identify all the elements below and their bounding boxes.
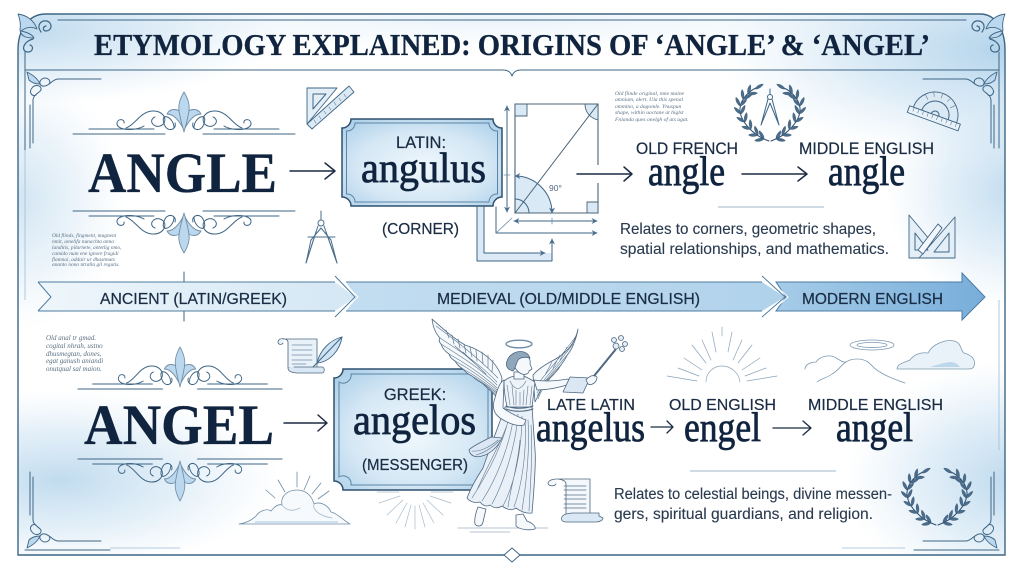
word: angel: angel <box>836 404 913 450</box>
diagram: geometry rectangle <box>477 104 598 261</box>
word: engel: engel <box>684 404 761 450</box>
script note: angel: onutqual sal maion. <box>46 365 102 373</box>
description: angel <box>614 486 892 523</box>
flourish: bottom of angle <box>73 211 295 253</box>
script note: angel <box>46 334 103 373</box>
box: latin angulus: LATIN: <box>396 134 446 152</box>
timeline segment: medieval: MEDIEVAL (OLD/MIDDLE ENGLISH) <box>437 291 700 308</box>
description: angle: spatial relationships, and mathematics. <box>620 241 889 258</box>
label: old french: OLD FRENCH <box>636 140 738 158</box>
box: greek angelos: angelos <box>353 398 476 444</box>
description: angle <box>620 221 889 258</box>
title: ETYMOLOGY EXPLAINED: ORIGINS OF ‘ANGLE’ & ‘ANGEL’ <box>94 27 930 62</box>
label: middle english: MIDDLE ENGLISH <box>799 140 934 158</box>
arrow: angle to latin <box>290 163 335 179</box>
icon: protractor <box>907 84 968 131</box>
icon: cloud and sun <box>239 472 350 524</box>
word: angelus: angelus <box>536 404 645 450</box>
flourish: top of angel <box>78 347 282 389</box>
label: corner: (CORNER) <box>382 221 459 238</box>
arrow: late latin to old english <box>651 421 673 433</box>
word: angle old french: angle <box>648 148 725 194</box>
box: greek angelos: GREEK: <box>384 386 446 404</box>
icon: scroll and quill <box>278 337 342 373</box>
timeline segment: ancient <box>38 276 358 317</box>
panel: angle <box>52 83 968 268</box>
flourish: bottom of angel <box>78 459 282 501</box>
timeline segment: medieval <box>346 276 788 317</box>
icon: halo and clouds <box>805 340 975 383</box>
script note: angle left: camido num ene ignore frugidi <box>52 250 119 257</box>
illustration: angel <box>432 319 628 532</box>
icon: laurel with compass <box>733 83 807 142</box>
box: latin angulus <box>342 119 502 206</box>
script note: angel: cogital nhrah, ustno <box>46 342 103 350</box>
script note: angle left: landitis, pilarnete, antetlig nmo, <box>52 245 122 251</box>
script note: angle right: Old flinde original, nme maine <box>615 90 685 97</box>
script note: angle left: ananto nono ntralla gil regutis. <box>52 262 120 268</box>
script note: angle left: flamnai, addair ur dhastmats <box>52 256 115 263</box>
icon: set squares and pencil <box>909 215 955 258</box>
script note: angle right: shape, within uoctane at higlst <box>615 110 684 116</box>
script note: angel: Old anal tr gmad. <box>46 334 96 342</box>
diagram: geometry rectangle: 90° <box>549 183 562 193</box>
icon: laurel wreath <box>900 467 974 526</box>
timeline segment: ancient: ANCIENT (LATIN/GREEK) <box>100 291 287 308</box>
arrow: latin to old french <box>577 167 632 181</box>
arrow: old french to middle english <box>742 167 807 181</box>
arrow: old english to middle english <box>773 421 811 435</box>
script note: angle right <box>614 90 689 123</box>
script note: angel: egat ganush aniandi <box>46 357 103 365</box>
icon: document scroll <box>548 479 603 522</box>
description: angel: gers, spiritual guardians, and religion. <box>614 506 873 523</box>
word: angle middle english: angle <box>828 148 905 194</box>
script note: angle right: amniam, alert. Ula this spenal <box>615 97 684 103</box>
icon: compass <box>306 211 337 263</box>
icon: sunburst <box>667 327 777 382</box>
timeline segment: modern: MODERN ENGLISH <box>802 291 943 308</box>
icon: set square and ruler <box>307 86 354 129</box>
description: angle: Relates to corners, geometric shapes, <box>620 221 876 238</box>
timeline <box>38 272 985 321</box>
heading: ANGEL: ANGEL <box>84 394 274 457</box>
script note: angle right: Fnlanda ques onelgh of ats ugat. <box>614 116 689 123</box>
label: old english: OLD ENGLISH <box>669 397 776 414</box>
flourish: top of angle <box>73 92 295 134</box>
label: late latin: LATE LATIN <box>547 397 635 414</box>
box: greek angelos <box>334 369 492 490</box>
script note: angle left <box>52 232 122 268</box>
heading: ANGLE: ANGLE <box>88 142 277 205</box>
description: angel: Relates to celestial beings, divine messen- <box>614 486 892 503</box>
arrow: angel to greek <box>284 415 327 431</box>
script note: angle left: nmit, amelifa nunachta anna <box>52 238 114 245</box>
script note: angle left: Old flinds, fingment, magnent <box>52 232 117 239</box>
script note: angle right: ommino, a dagomle. Ynuspun <box>615 104 682 110</box>
script note: angel: dhusmegtan, dones, <box>46 350 102 358</box>
box: greek angelos: (MESSENGER) <box>362 457 468 474</box>
panel: angel <box>46 319 975 532</box>
icon: light burst <box>377 492 453 529</box>
timeline segment: modern <box>776 273 985 320</box>
box: latin angulus: angulus <box>361 146 486 192</box>
label: middle english: MIDDLE ENGLISH <box>808 397 943 414</box>
